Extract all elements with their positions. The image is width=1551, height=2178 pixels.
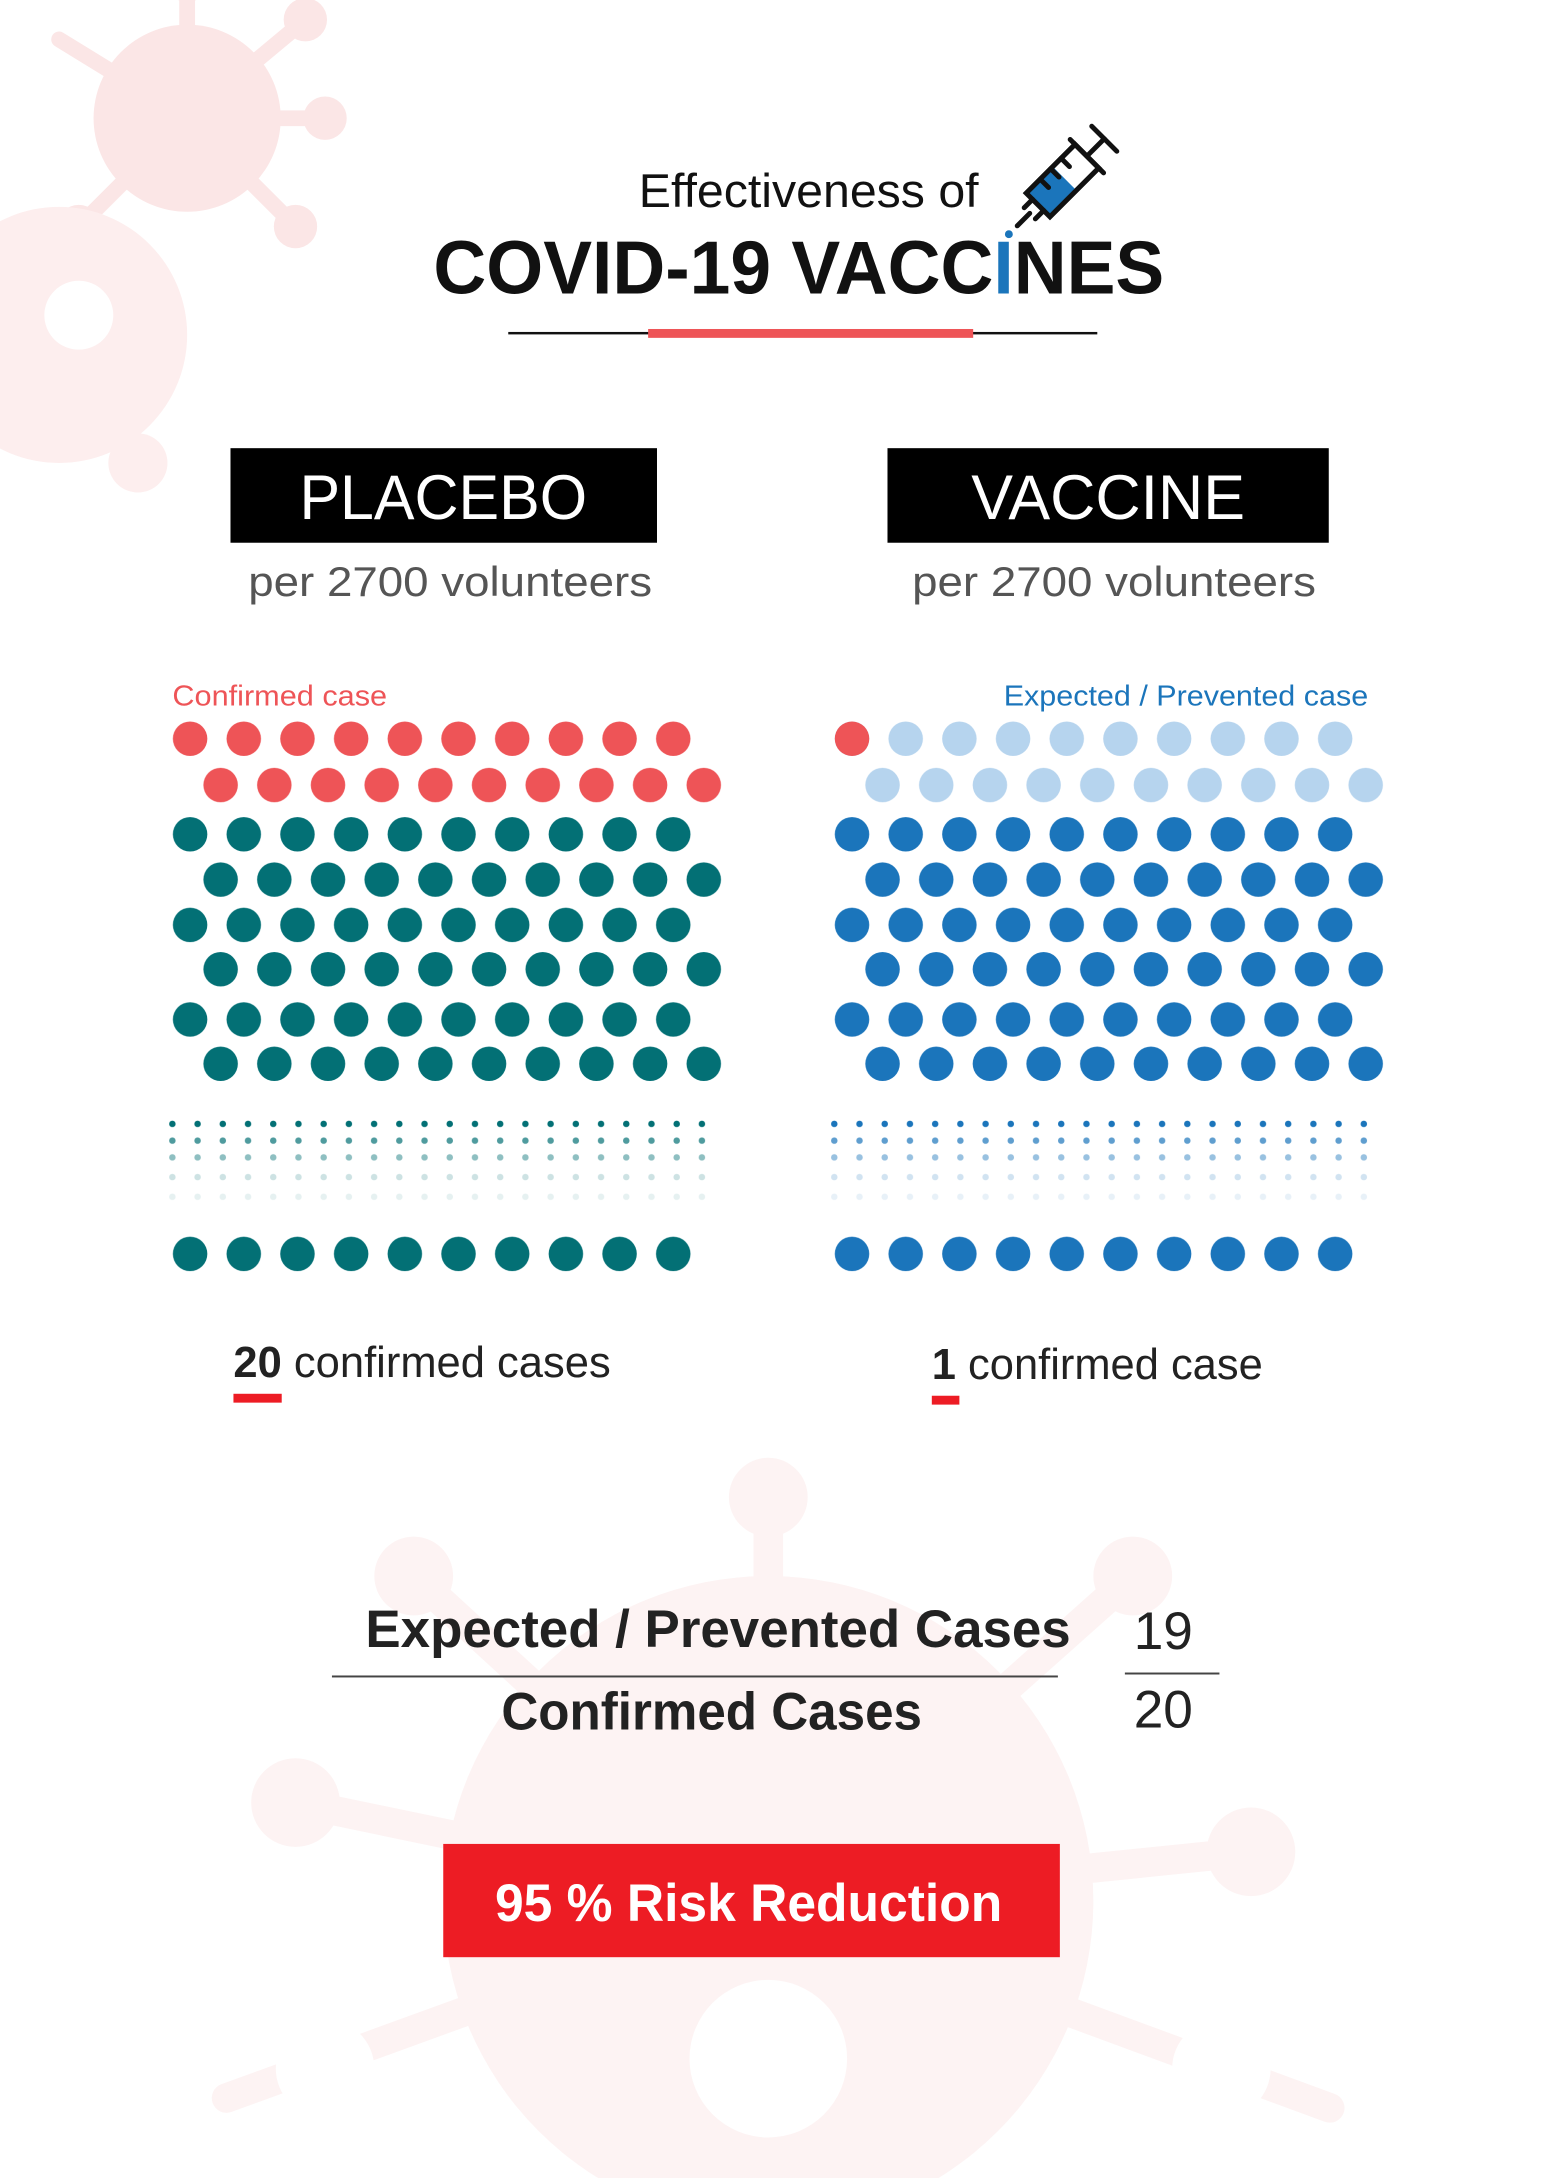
fraction formula: 19: [1134, 1602, 1193, 1661]
dot chart: vaccine: [822, 719, 1393, 1274]
panel: vaccine header: [887, 448, 1329, 605]
text: 1 confirmed case: 1 confirmed case: [932, 1341, 1263, 1389]
panel: placebo header: [230, 448, 657, 605]
text: 20 confirmed cases: 20 confirmed cases: [233, 1339, 611, 1387]
background virus top-left: [0, 0, 347, 492]
title: Effectiveness of: [639, 165, 979, 218]
title underline: [508, 329, 1097, 338]
fraction formula: 20: [1134, 1681, 1193, 1740]
title: [433, 165, 1164, 310]
fraction formula: [332, 1600, 1219, 1742]
fraction formula: Confirmed Cases: [501, 1683, 922, 1742]
panel: vaccine header: per 2700 volunteers: [912, 559, 1316, 605]
callout: 95% risk reduction: 95 % Risk Reduction: [495, 1874, 1002, 1933]
background virus bottom: [227, 1458, 1330, 2178]
legend: confirmed case: Confirmed case: [172, 680, 387, 712]
panel: placebo header: PLACEBO: [299, 463, 587, 533]
title: COVID-19 VACCINES: [433, 226, 1164, 310]
callout: 95% risk reduction: [443, 1844, 1060, 1957]
icon: syringe: [989, 122, 1121, 254]
panel: placebo header: per 2700 volunteers: [248, 559, 652, 605]
fraction formula: Expected / Prevented Cases: [365, 1600, 1071, 1659]
dot chart: placebo: [160, 719, 731, 1274]
legend: expected / prevented case: Expected / Prevented case: [1004, 680, 1368, 712]
panel: vaccine header: VACCINE: [971, 463, 1245, 533]
